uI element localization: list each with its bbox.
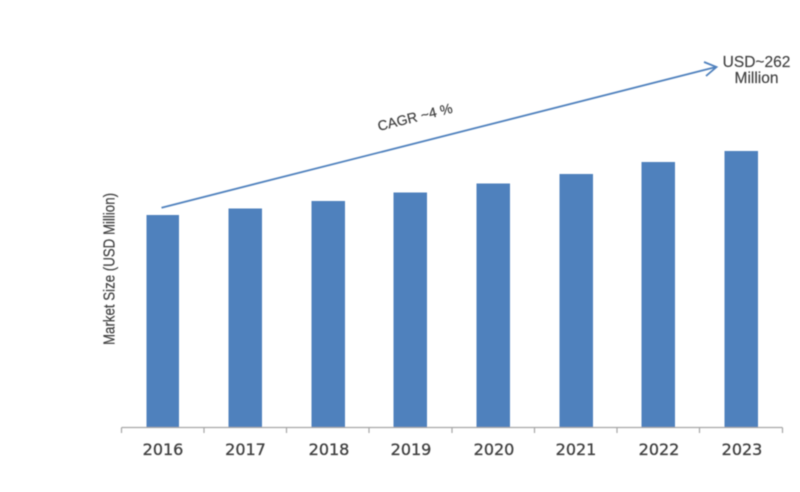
y-axis title: Market Size (USD Million) (102, 193, 118, 345)
bar: 2022 (642, 162, 675, 427)
year labels: 2022 (639, 440, 679, 459)
year labels: 2020 (474, 440, 514, 459)
end value callout: Million (735, 70, 778, 87)
bar: 2019 (394, 192, 427, 427)
year labels: 2018 (309, 440, 349, 459)
end value callout (723, 54, 790, 87)
x axis (122, 428, 782, 433)
year labels: 2019 (391, 440, 431, 459)
bar: 2017 (228, 208, 262, 427)
bar: 2018 (312, 201, 345, 427)
CAGR label: CAGR ~4 % (376, 100, 454, 134)
year labels: 2023 (722, 440, 762, 459)
year labels: 2017 (225, 440, 266, 459)
year labels: 2021 (556, 440, 596, 459)
bars (146, 151, 758, 427)
end value callout: USD~262 (723, 54, 790, 71)
bar: 2020 (476, 184, 510, 427)
year labels: 2016 (143, 440, 183, 459)
bar: 2023 (724, 151, 758, 427)
year labels (143, 440, 762, 459)
CAGR growth arrow (162, 62, 716, 208)
bar: 2016 (146, 215, 179, 427)
bar: 2021 (560, 174, 593, 427)
